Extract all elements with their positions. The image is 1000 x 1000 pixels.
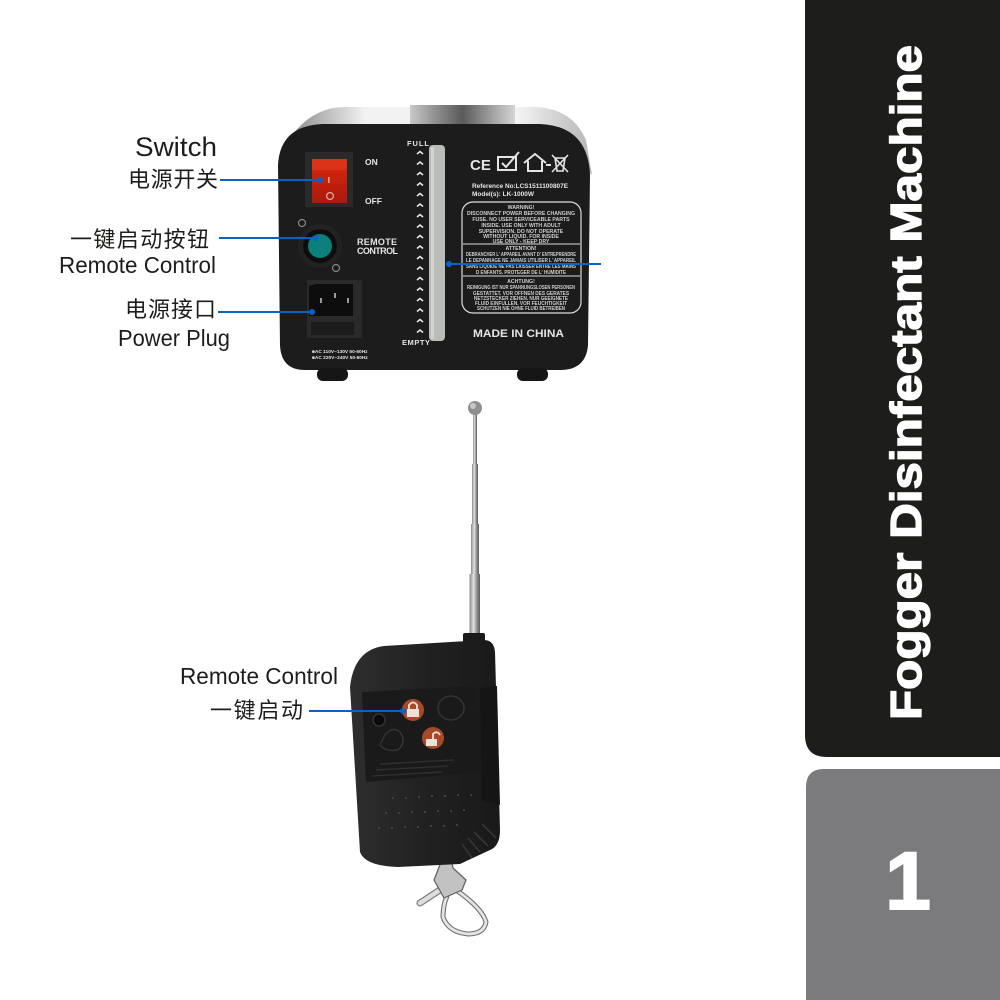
rocker switch <box>305 152 353 207</box>
made in china: MADE IN CHINA <box>473 328 564 340</box>
certification marks: CE <box>470 157 491 174</box>
callout: remote control button: 一键启动按钮 <box>70 227 209 252</box>
warning label: D ENFANTS. PROTEGER DE L' HUMIDITE <box>476 270 566 276</box>
fluid level window <box>429 145 445 341</box>
callout: switch: Switch <box>135 132 217 162</box>
key ring clasp <box>420 843 486 934</box>
warning label: FUSE. NO USER SERVICEABLE PARTS <box>472 217 570 223</box>
silver neck <box>410 105 515 127</box>
rubber feet <box>317 368 348 381</box>
callout: remote fob <box>180 663 406 723</box>
callout: fluid level <box>446 261 601 267</box>
remote control button <box>298 220 342 272</box>
warning label <box>462 202 581 313</box>
callout: remote control button <box>59 227 319 278</box>
machine body <box>278 124 590 370</box>
warning label: DISCONNECT POWER BEFORE CHANGING <box>467 211 575 217</box>
remote fob <box>350 640 500 867</box>
fob side grip <box>480 686 500 805</box>
reference text: Reference No:LCS1511100807E <box>472 184 568 190</box>
level scale: FULL <box>407 139 429 148</box>
silver housing edge <box>290 107 592 175</box>
callout: switch <box>128 132 323 192</box>
voltage note <box>312 349 368 361</box>
level scale: EMPTY <box>402 338 430 347</box>
fob speaker dots <box>378 794 472 829</box>
callout: remote control button: Remote Control <box>59 252 216 278</box>
callout: power plug: Power Plug <box>118 325 230 351</box>
warning label: DEBRANCHER L' APPAREIL AVANT D' ENTREPRENDRE <box>466 252 576 258</box>
warning label: GESTATTET. VOR OFFNEN DES GERATES <box>473 291 569 297</box>
warning label: SCHUTZEN NIE OHNE FLUID BETREIBEN <box>477 306 565 312</box>
page number 1: 1 <box>885 836 931 927</box>
unlock button <box>422 727 444 749</box>
fob grip ribs <box>462 824 496 858</box>
callout: power plug: 电源接口 <box>125 297 216 322</box>
voltage note: ■AC 110V~130V 50-60Hz <box>312 349 368 355</box>
fob ridges <box>372 760 454 776</box>
switch on off labels <box>365 157 382 206</box>
reference text <box>472 184 568 198</box>
level scale <box>402 139 430 347</box>
callout: remote fob: 一键启动 <box>210 698 303 723</box>
clasp loop <box>443 890 486 934</box>
warning label: WARNING! <box>508 205 535 211</box>
warning label: LE DEPANNAGE NE JAMAIS UTILISER L' APPAREIL <box>466 258 577 264</box>
clasp finger <box>420 884 449 903</box>
power socket <box>307 280 362 338</box>
telescopic antenna <box>463 401 485 643</box>
warning label: FLUID EINFULLEN. VOR FEUCHTIGKEIT <box>475 301 568 307</box>
switch on off labels: ON <box>365 157 378 167</box>
warning label: REINIGUNG IST NUR SPANNUNGSLOSEN PERSONEN <box>467 285 575 291</box>
callout: power plug <box>118 297 315 351</box>
voltage note: ■AC 220V~240V 50-60Hz <box>312 355 368 361</box>
callout: remote fob: Remote Control <box>180 663 338 689</box>
warning label: SUPERVISION. DO NOT OPERATE <box>479 229 564 235</box>
remote control label: REMOTE <box>357 237 397 247</box>
lock button <box>402 699 424 721</box>
warning label: INSIDE. USE ONLY WITH ADULT <box>481 223 561 229</box>
title: Fogger Disinfectant Machine <box>882 45 931 720</box>
warning label: NETZSTECKER ZIEHEN. NUR GEEIGNETE <box>474 296 568 302</box>
panel: product title sidebar <box>805 0 1000 757</box>
callout: switch: 电源开关 <box>128 167 218 192</box>
fob dark buttons <box>373 696 464 750</box>
warning label: ATTENTION! <box>505 246 537 252</box>
reference text: Model(s): LK-1000W <box>472 192 534 198</box>
clasp body <box>434 843 466 898</box>
remote control label <box>357 237 398 256</box>
remote control label: CONTROL <box>357 246 398 256</box>
switch on off labels: OFF <box>365 196 382 206</box>
fob button plate <box>362 686 482 782</box>
warning label: SANS LIQUIDE NE PAS LAISSER ENTRE LES MAINS <box>466 264 576 270</box>
panel: page number <box>806 769 1000 1000</box>
machine rear panel <box>278 105 592 381</box>
warning label: WITHOUT LIQUID. FOR INSIDE <box>483 234 559 240</box>
warning label: USE ONLY - KEEP DRY <box>493 239 550 245</box>
certification marks <box>470 152 568 174</box>
warning label: ACHTUNG! <box>507 279 535 285</box>
